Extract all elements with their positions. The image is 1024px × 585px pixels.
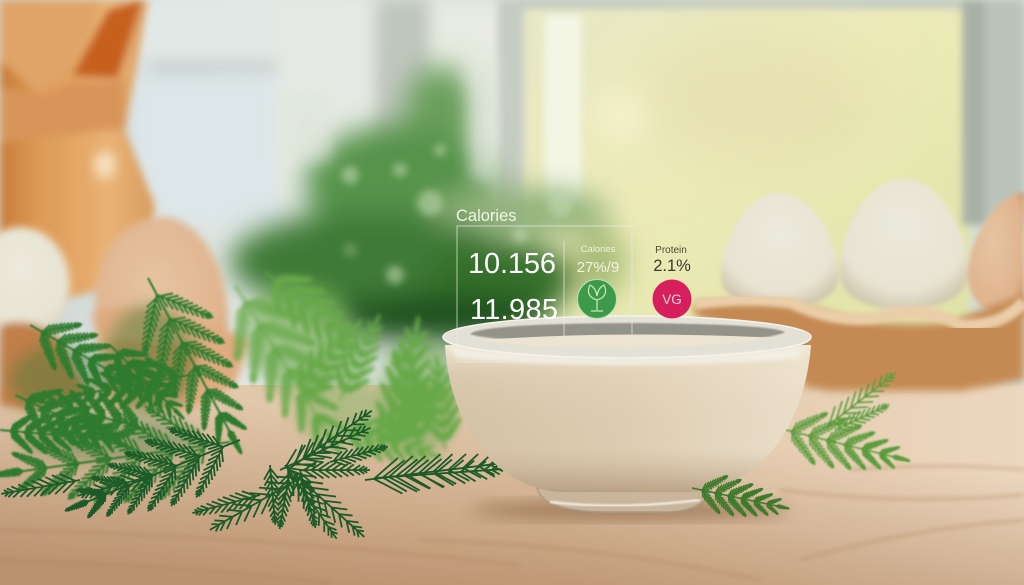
icon: green leaf badge [578, 280, 616, 318]
table surface [0, 385, 1024, 585]
dill sprigs: dark foreground bunch [1, 409, 504, 540]
label: Protein 2.1%: Protein [655, 245, 687, 256]
background herb plant (blurred) [230, 60, 626, 342]
label: Protein 2.1%: 2.1% [653, 257, 691, 275]
label: Calories 27%: Calories [581, 244, 616, 255]
icon: pink VG badge [652, 280, 692, 318]
glass bowl of milk [443, 316, 811, 512]
label: Calories 27%: 27%/9 [577, 259, 619, 276]
stat: 10.156: 10.156 [468, 248, 556, 280]
icon: pink VG badge: VG [662, 292, 682, 307]
dill sprigs: far light green [231, 272, 464, 466]
dill sprig in front of bowl [692, 474, 790, 517]
overlay panel frame [457, 226, 632, 362]
nutrition overlay [456, 207, 692, 362]
egg carton with eggs [694, 179, 1024, 391]
stat: 11.985: 11.985 [470, 294, 558, 326]
dill sprigs: left mid green [0, 276, 248, 504]
heading: Calories: Calories [456, 207, 517, 225]
label: Calories 27% [578, 246, 618, 272]
background: blurred window and wall [0, 0, 1024, 400]
label: Protein 2.1% [654, 246, 690, 271]
left eggs and cups [0, 217, 250, 410]
dill sprig: right small [786, 371, 912, 471]
dill sprigs: blurred green masses [10, 280, 460, 462]
clay vase [0, 0, 155, 300]
